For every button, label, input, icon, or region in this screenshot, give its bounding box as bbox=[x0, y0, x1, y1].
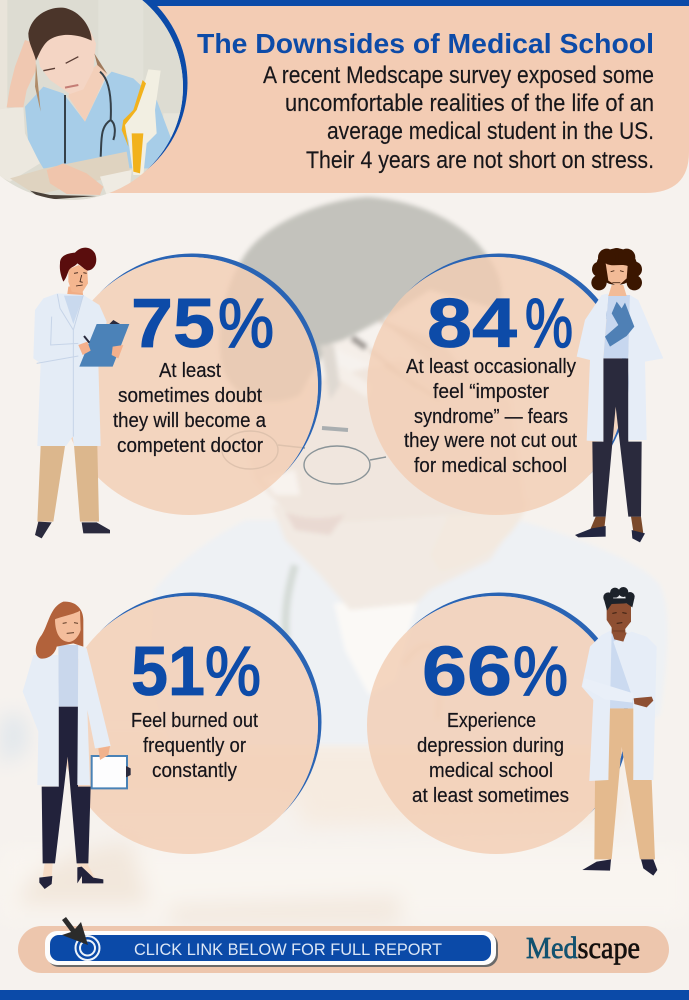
text: depression: at least sometimes bbox=[412, 785, 569, 807]
face bbox=[235, 360, 525, 525]
icon: arrow cursor bbox=[62, 917, 88, 945]
stethoscope bbox=[285, 565, 295, 640]
fingers bbox=[385, 322, 480, 390]
stat: 66%: % bbox=[513, 632, 568, 710]
text: doubt competence: sometimes doubt bbox=[118, 385, 262, 407]
stat: 51% bbox=[131, 632, 261, 710]
forearm bbox=[430, 500, 528, 572]
stat: 75%: % bbox=[218, 284, 274, 362]
button label: CLICK LINK BELOW FOR FULL REPORT bbox=[134, 940, 442, 959]
neck bbox=[68, 63, 107, 122]
panel: 51% stat bbox=[23, 593, 321, 889]
figure: female doctor with blue gloves bbox=[575, 248, 663, 542]
panel: 66% stat bbox=[367, 587, 657, 876]
top blue bar bbox=[150, 0, 689, 6]
text: doubt competence bbox=[113, 360, 267, 457]
stat: 66% bbox=[422, 632, 568, 710]
text: doubt competence: competent doctor bbox=[117, 435, 263, 457]
header photo: stressed student bbox=[0, 0, 188, 200]
panel: 75% stat bbox=[33, 248, 321, 538]
stat: 84% bbox=[427, 284, 573, 362]
text: depression: depression during bbox=[417, 735, 564, 757]
text: depression bbox=[412, 710, 569, 807]
knee model bbox=[123, 69, 161, 175]
stat: 66%: 66 bbox=[422, 632, 512, 710]
text: imposter syndrome: At least occasionally bbox=[406, 356, 576, 378]
face bbox=[36, 28, 96, 94]
glasses bbox=[222, 428, 386, 484]
stat: 51%: % bbox=[205, 632, 261, 710]
text: depression: medical school bbox=[429, 760, 553, 782]
closed eyes bbox=[43, 57, 78, 71]
icon: target rings bbox=[76, 936, 100, 960]
text: burned out: frequently or bbox=[143, 735, 246, 757]
figure: male doctor thinking bbox=[582, 587, 657, 876]
intro text: Their 4 years are not short on stress. bbox=[306, 147, 654, 174]
header band bbox=[0, 0, 689, 213]
lips bbox=[285, 512, 345, 535]
stat: 84%: % bbox=[525, 284, 573, 362]
white sleeve bbox=[0, 107, 40, 182]
hair bbox=[220, 197, 502, 402]
text: imposter syndrome: syndrome” — fears bbox=[414, 406, 568, 428]
neck and shirt bbox=[334, 603, 417, 695]
intro text bbox=[263, 62, 654, 174]
panel: 84% stat bbox=[367, 248, 663, 542]
figure: female doctor with tablet bbox=[23, 602, 131, 889]
arm bbox=[7, 40, 36, 107]
book bbox=[10, 152, 130, 193]
stat: 84%: 84 bbox=[427, 284, 517, 362]
text: depression: Experience bbox=[447, 710, 536, 732]
text: burned out: constantly bbox=[152, 760, 237, 782]
hair bbox=[28, 8, 92, 61]
title: The Downsides of Medical School bbox=[197, 28, 654, 59]
text: doubt competence: they will become a bbox=[113, 410, 267, 432]
text: doubt competence: At least bbox=[159, 360, 221, 382]
figure: male doctor with clipboard bbox=[33, 248, 129, 538]
stat: 75%: 75 bbox=[131, 284, 215, 362]
bottom bar bbox=[0, 990, 689, 1000]
text: imposter syndrome: they were not cut out bbox=[404, 430, 577, 452]
scrubs bbox=[25, 72, 172, 168]
text: burned out bbox=[131, 710, 258, 782]
stethoscope bbox=[65, 72, 115, 163]
text: burned out: Feel burned out bbox=[131, 710, 258, 732]
text: imposter syndrome bbox=[404, 356, 577, 477]
stat: 51%: 51 bbox=[131, 632, 205, 710]
text: imposter syndrome: for medical school bbox=[414, 455, 567, 477]
hand bbox=[47, 163, 103, 195]
text: imposter syndrome: feel “imposter bbox=[433, 381, 549, 403]
coat bbox=[150, 520, 668, 745]
button: click link bbox=[45, 917, 498, 967]
logo: Medscape: Medscape bbox=[526, 930, 640, 965]
footer band bbox=[18, 917, 669, 973]
intro text: uncomfortable realities of the life of an bbox=[285, 90, 654, 117]
stat: 75% bbox=[131, 284, 274, 362]
